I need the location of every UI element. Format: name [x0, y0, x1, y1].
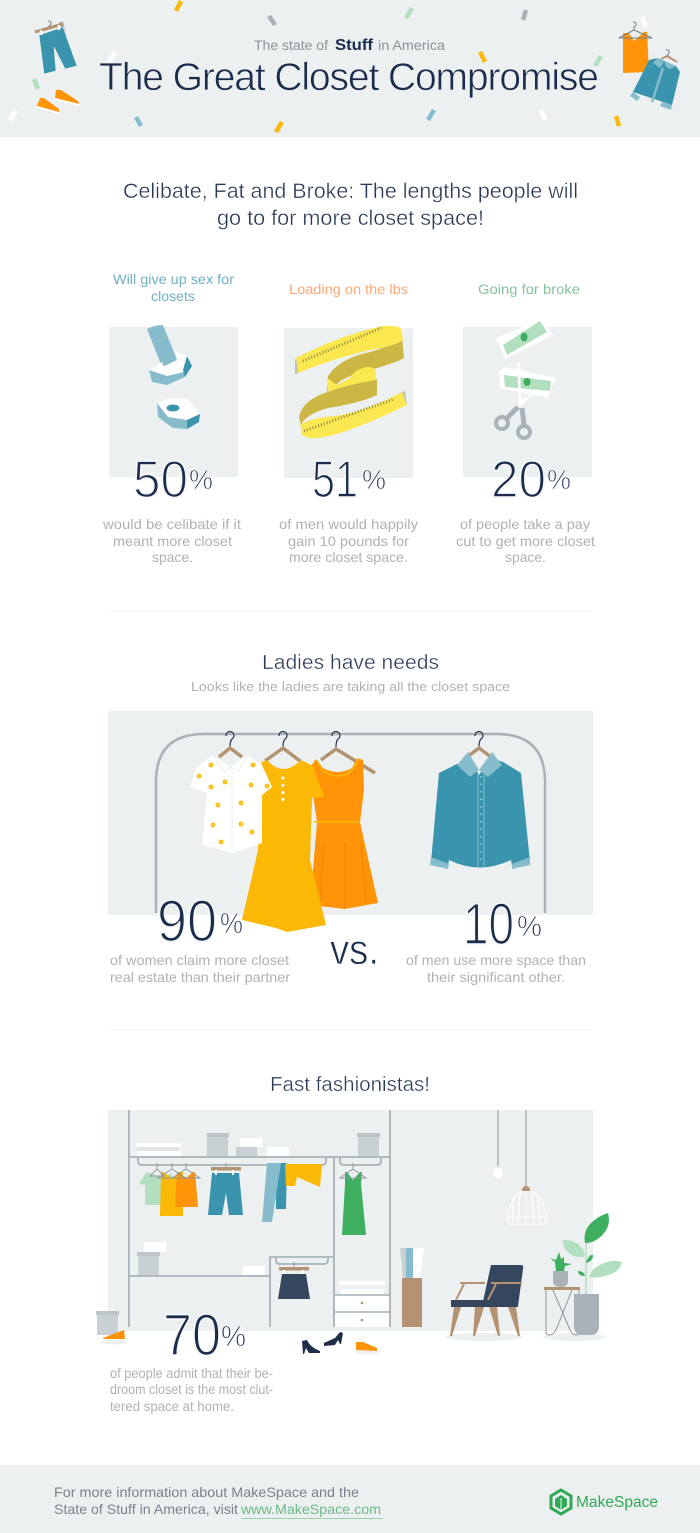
stat: 70% cluttered: of people admit that their be-	[110, 1365, 273, 1381]
heading: ladies have needs: Looks like the ladies are taking all the closet space	[191, 679, 510, 694]
stat: 90% women: %	[220, 908, 243, 940]
column: weight gain: %	[362, 464, 386, 495]
stat: 10% men: their significant other.	[427, 969, 565, 985]
panel: clothes rack	[108, 711, 593, 932]
icon: measuring tape	[295, 326, 407, 438]
column: celibate: Will give up sex for	[113, 272, 235, 287]
section heading: Celibate, Fat and Broke: The lengths people will	[123, 180, 578, 203]
column: pay cut	[456, 282, 595, 565]
stat: 70% cluttered: 70	[163, 1303, 221, 1368]
heading: ladies have needs	[191, 652, 510, 694]
yellow dress	[242, 760, 326, 932]
column: celibate: meant more closet	[113, 533, 232, 549]
column: weight gain: Loading on the lbs	[289, 282, 408, 297]
section heading: go to for more closet space!	[217, 207, 484, 230]
column: celibate: %	[189, 464, 213, 495]
icon: jeans on hanger	[35, 21, 77, 74]
stat: 70% cluttered: tered space at home.	[110, 1398, 234, 1414]
column: pay cut: %	[547, 464, 571, 495]
section heading	[123, 180, 578, 230]
header band	[0, 0, 700, 137]
column: celibate	[102, 272, 241, 565]
stat: 10% men: %	[517, 911, 542, 943]
logo	[551, 1490, 658, 1514]
footer text: State of Stuff in America, visit	[54, 1501, 238, 1517]
stat: 10% men: 10	[463, 892, 514, 957]
boxes on shelves	[136, 1133, 385, 1294]
column: celibate: closets	[151, 289, 195, 304]
icon: orange sneakers	[37, 90, 79, 113]
pendant lamps	[493, 1110, 547, 1225]
footer text	[54, 1484, 383, 1519]
floor items	[96, 1311, 379, 1354]
stat: 90% women: of women claim more closet	[110, 952, 289, 968]
column: pay cut: cut to get more closet	[456, 533, 595, 549]
panel: cluttered closet room	[96, 1110, 622, 1354]
stat: 90% women: 90	[157, 889, 217, 954]
column: weight gain: more closet space.	[289, 549, 408, 565]
blue shirt	[430, 752, 530, 869]
hanging clothes	[139, 1163, 366, 1299]
stat: 70% cluttered: droom closet is the most clut-	[110, 1381, 273, 1397]
column: pay cut: 20	[491, 451, 546, 509]
footer	[0, 1465, 700, 1533]
stat: 10% men: of men use more space than	[406, 952, 586, 968]
heading: fast fashionistas: Fast fashionistas!	[270, 1074, 430, 1096]
subtitle	[254, 37, 446, 54]
column: pay cut: Going for broke	[478, 282, 580, 297]
dress buttons	[282, 776, 284, 801]
hangers	[226, 732, 483, 747]
heading: ladies have needs: Ladies have needs	[262, 652, 439, 674]
closet frame	[129, 1110, 390, 1327]
column: pay cut: of people take a pay	[460, 516, 590, 532]
icon: cut hex bolt	[147, 325, 200, 429]
icon: scissors cutting banknote	[496, 320, 556, 438]
stat: 10% men	[406, 892, 586, 985]
stat: 90% women	[110, 889, 290, 985]
subtitle: Stuff	[335, 37, 374, 54]
orange dress	[310, 758, 378, 909]
column: pay cut: space.	[505, 549, 546, 565]
column: celibate: 50	[133, 451, 188, 509]
stat: 70% cluttered	[110, 1303, 273, 1414]
books and box	[400, 1248, 424, 1327]
footer text: www.MakeSpace.com	[240, 1501, 381, 1517]
vs label: vs.	[330, 926, 379, 974]
subtitle: in America	[378, 38, 446, 53]
logo: MakeSpace	[576, 1494, 658, 1511]
subtitle: The state of	[254, 38, 328, 53]
column: celibate: would be celibate if it	[102, 516, 241, 532]
plant stand and pots	[543, 1213, 622, 1341]
stat: 70% cluttered: %	[221, 1321, 246, 1353]
chair	[445, 1265, 523, 1341]
stat: 90% women: real estate than their partner	[110, 969, 290, 985]
icon: orange top on hanger	[619, 22, 652, 73]
footer text: For more information about MakeSpace and the	[54, 1484, 359, 1500]
title: The Great Closet Compromise	[99, 56, 599, 99]
column: celibate: space.	[152, 549, 193, 565]
icon: denim shirt	[630, 50, 680, 110]
column: weight gain	[279, 282, 418, 565]
column: weight gain: gain 10 pounds for	[288, 533, 409, 549]
white shirt	[190, 755, 272, 853]
column: weight gain: of men would happily	[279, 516, 418, 532]
drawers	[334, 1295, 390, 1327]
column: weight gain: 51	[312, 451, 358, 509]
